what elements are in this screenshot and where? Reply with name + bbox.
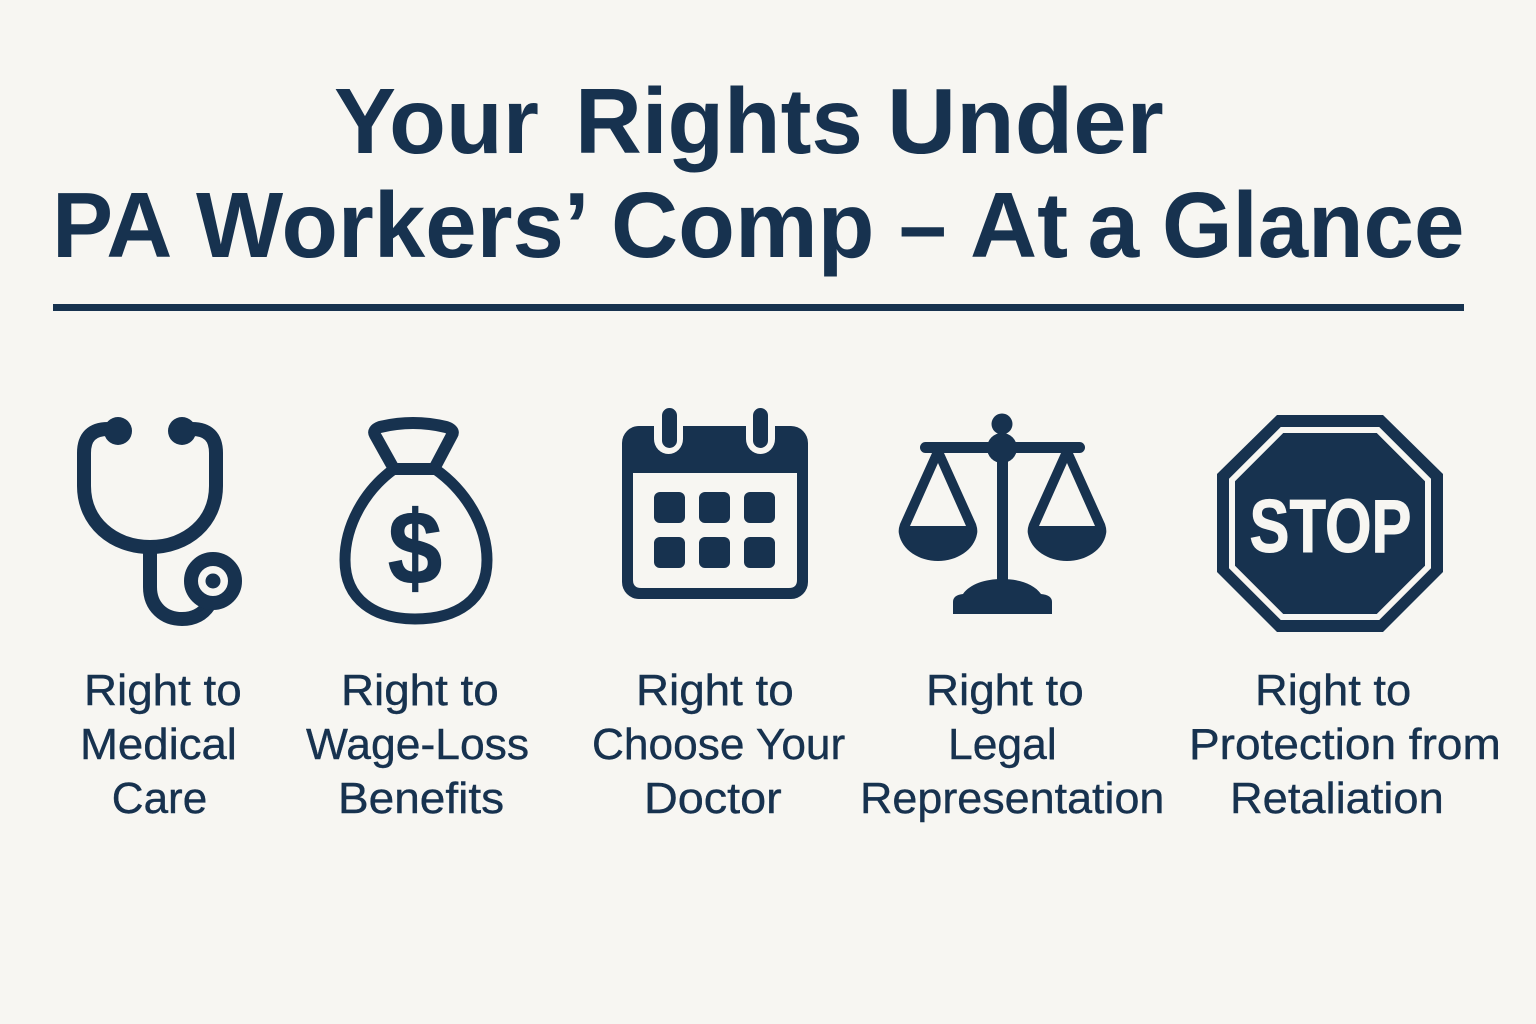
title: – bbox=[899, 173, 947, 277]
label: medical care: Right to bbox=[84, 666, 242, 715]
label: choose your doctor: Choose Your bbox=[592, 720, 845, 769]
label: protection from retaliation: Right to bbox=[1255, 666, 1411, 715]
icon: calendar bbox=[622, 408, 808, 599]
title: Comp bbox=[611, 173, 874, 277]
label: choose your doctor: Doctor bbox=[644, 774, 782, 823]
title: Rights bbox=[575, 69, 863, 173]
icon: money bag: $ bbox=[388, 491, 442, 607]
title: Glance bbox=[1162, 173, 1464, 277]
icon: scales of justice bbox=[899, 414, 1106, 614]
label: wage-loss benefits bbox=[306, 666, 529, 823]
icon: stethoscope bbox=[84, 417, 235, 619]
label: wage-loss benefits: Benefits bbox=[338, 774, 504, 823]
title: Under bbox=[887, 69, 1164, 173]
label: legal representation bbox=[860, 666, 1164, 823]
label: choose your doctor bbox=[592, 666, 845, 823]
icon: stop sign bbox=[1217, 415, 1443, 632]
label: medical care bbox=[80, 666, 242, 823]
title bbox=[52, 69, 1464, 277]
icon: stop sign: STOP bbox=[1250, 484, 1412, 568]
label: wage-loss benefits: Wage-Loss bbox=[306, 720, 529, 769]
label: protection from retaliation: Retaliation bbox=[1230, 774, 1444, 823]
icon: money bag bbox=[345, 423, 487, 619]
label: legal representation: Right to bbox=[926, 666, 1083, 715]
title: At bbox=[970, 173, 1068, 277]
label: choose your doctor: Right to bbox=[636, 666, 793, 715]
label: legal representation: Representation bbox=[860, 774, 1164, 823]
label: medical care: Medical bbox=[80, 720, 237, 769]
label: protection from retaliation: Protection from bbox=[1188, 720, 1500, 769]
title: PA bbox=[52, 173, 172, 277]
label: medical care: Care bbox=[112, 774, 207, 823]
heading divider bbox=[53, 304, 1464, 311]
title: Workers’ bbox=[196, 173, 590, 277]
label: legal representation: Legal bbox=[948, 720, 1057, 769]
label: wage-loss benefits: Right to bbox=[341, 666, 499, 715]
label: protection from retaliation bbox=[1188, 666, 1500, 823]
title: Your bbox=[334, 69, 539, 173]
title: a bbox=[1088, 173, 1139, 277]
